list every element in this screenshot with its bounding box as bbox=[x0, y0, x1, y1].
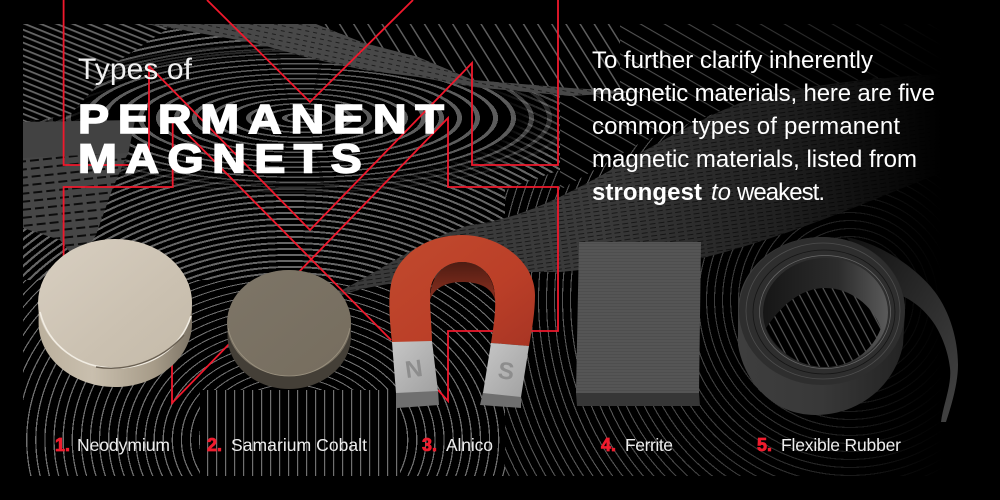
label 5: flexible rubber: 5. bbox=[757, 435, 772, 455]
intro paragraph: magnetic materials, here are five bbox=[592, 80, 935, 107]
rubber roll body bbox=[738, 237, 905, 415]
label 1: neodymium: 1. bbox=[55, 435, 70, 455]
magnet 5: flexible rubber roll bbox=[738, 237, 958, 422]
magnet 2: samarium cobalt disk bbox=[227, 270, 351, 389]
south pole tip: S bbox=[496, 357, 516, 386]
intro paragraph: To further clarify inherently bbox=[592, 47, 873, 74]
north pole tip bbox=[392, 341, 439, 408]
label 2: samarium cobalt: Samarium Cobalt bbox=[231, 435, 367, 455]
intro paragraph: magnetic materials, listed from bbox=[592, 146, 917, 173]
intro paragraph: to bbox=[711, 179, 731, 206]
label 4: ferrite: 4. bbox=[601, 435, 616, 455]
label 2: samarium cobalt: 2. bbox=[207, 435, 222, 455]
rubber roll top rim bbox=[739, 237, 905, 385]
rubber hole showing background bbox=[766, 288, 881, 367]
label 5: flexible rubber: Flexible Rubber bbox=[781, 435, 901, 455]
intro paragraph: weakest. bbox=[736, 179, 825, 206]
magnet 3: alnico horseshoe bbox=[389, 235, 535, 408]
magnet 4: ferrite block bbox=[576, 242, 701, 406]
south pole tip bbox=[480, 343, 529, 408]
intro paragraph: common types of permanent bbox=[592, 113, 900, 140]
intro paragraph bbox=[592, 47, 935, 206]
label 3: alnico: 3. bbox=[422, 435, 437, 455]
label 3: alnico: Alnico bbox=[446, 435, 493, 455]
horseshoe red body bbox=[389, 235, 535, 346]
title line: Magnets: MAGNETS bbox=[78, 136, 362, 182]
label 4: ferrite bbox=[601, 435, 673, 455]
red magnet outline lines bbox=[64, 0, 558, 403]
title bbox=[78, 53, 444, 182]
intro paragraph: strongest bbox=[592, 179, 702, 206]
rubber loose tail bbox=[846, 237, 958, 422]
rubber inner wall bbox=[763, 258, 888, 367]
label 4: ferrite: Ferrite bbox=[625, 435, 673, 455]
horseshoe inner shadow bbox=[430, 262, 495, 300]
title line: Permanent: PERMANENT bbox=[78, 97, 444, 142]
magnet 1: neodymium disk bbox=[38, 239, 192, 387]
title line: Types of: Types of bbox=[78, 53, 193, 86]
label 1: neodymium: Neodymium bbox=[77, 435, 170, 455]
north pole tip: N bbox=[403, 355, 424, 384]
label 3: alnico bbox=[422, 435, 493, 455]
